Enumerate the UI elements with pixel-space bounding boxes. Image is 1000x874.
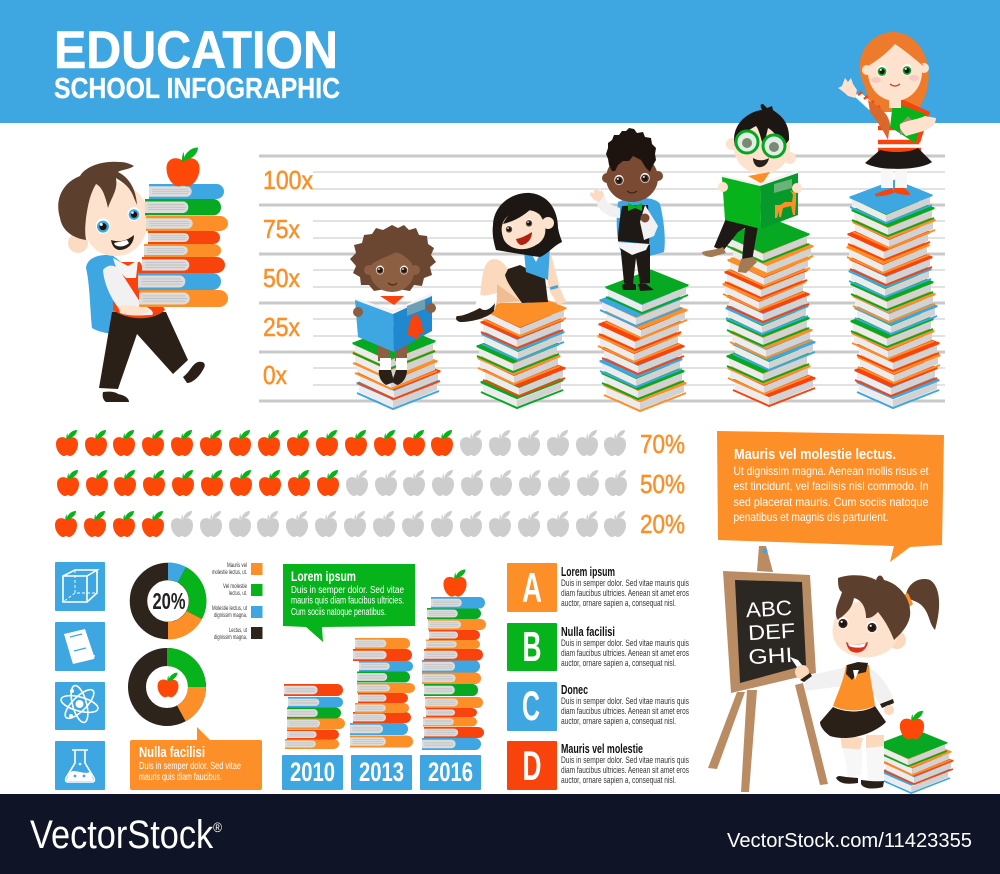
donut legend: Mauris vel [227, 563, 247, 569]
skirt [820, 706, 886, 738]
chalk letters: ABC [745, 597, 792, 622]
year label 2013 [351, 755, 412, 790]
footer logo: VectorStock [30, 813, 243, 857]
shoes [622, 283, 636, 290]
easel with chalkboard [708, 546, 828, 792]
donut legend: Molestie lectus, ut [212, 606, 247, 612]
orange vest [833, 665, 875, 710]
apple on 2016 stack [443, 569, 467, 597]
donut chart apple [137, 648, 206, 721]
book stack 4 [723, 219, 815, 406]
donut legend [212, 563, 262, 641]
scale labels [263, 165, 313, 390]
hair [350, 225, 436, 291]
orange speech bubble [717, 431, 944, 562]
open green book [721, 170, 798, 229]
chalk letters: GHI [748, 644, 793, 669]
bubble body: sed placerat mauris. Cum sociis natoque [734, 495, 929, 509]
glasses [736, 131, 758, 153]
book stack 2013 [350, 638, 415, 748]
board frame [723, 571, 816, 693]
hand and chalk [790, 657, 812, 682]
socks [843, 748, 863, 777]
shirt collar [113, 258, 138, 278]
item A [507, 563, 689, 612]
item B: Duis in semper dolor. Sed vitae mauris quis [561, 638, 689, 649]
face [364, 265, 374, 275]
book stack 2016 [422, 597, 486, 750]
chalk letters [745, 597, 797, 669]
bubble body: Ut dignissim magna. Aenean mollis risus et [734, 464, 929, 478]
legs [881, 168, 893, 188]
item B [507, 623, 689, 671]
raised leg [480, 259, 530, 303]
ponytail [906, 579, 939, 630]
icon: book [55, 622, 105, 671]
vest [113, 262, 165, 318]
scale labels: 25x [263, 312, 300, 342]
easel top [757, 546, 773, 572]
fringe [868, 40, 923, 66]
open blue book [355, 293, 432, 352]
item C: Duis in semper dolor. Sed vitae mauris quis [561, 696, 689, 707]
item D [507, 741, 689, 790]
bubble body [734, 464, 929, 524]
item A: Duis in semper dolor. Sed vitae mauris quis [561, 578, 689, 589]
item C [507, 682, 689, 731]
grid lines scale [259, 156, 945, 401]
item C: Donec [561, 682, 588, 697]
icon: deer [775, 190, 796, 218]
item B: auctor, ornare sapien a, consequat nisl. [561, 658, 676, 669]
teacher girl [790, 575, 939, 789]
icon: apple [158, 673, 178, 697]
braid [868, 100, 890, 140]
percent labels: 20% [640, 509, 685, 539]
percent labels: 50% [640, 469, 685, 499]
green speech bubble: Duis in semper dolor. Sed vitae [291, 585, 404, 596]
icon: flask [55, 741, 105, 790]
item D: Mauris vel molestie [561, 741, 643, 756]
apple on small stack [900, 711, 924, 739]
scale labels: 100x [263, 165, 313, 195]
book stack 2 [477, 293, 566, 408]
green speech bubble: Lorem ipsum [291, 568, 356, 584]
year label 2016 [420, 755, 481, 790]
donut legend: dignissim magna. [214, 635, 247, 641]
bow tie [628, 203, 642, 211]
scale labels: 75x [263, 214, 300, 244]
donut legend: dignissim magna. [214, 613, 247, 619]
hair [734, 104, 789, 148]
mouth [753, 158, 769, 167]
held green book [890, 97, 930, 143]
hair [493, 193, 562, 257]
year label 2016: 2016 [428, 757, 473, 787]
icon: bird [408, 314, 423, 340]
boy's book stack [138, 184, 228, 307]
shoes [875, 188, 894, 196]
vest [524, 247, 550, 280]
item D: auctor, ornare sapien a, consequat nisl. [561, 775, 676, 786]
chalkboard [735, 580, 806, 683]
icon: cube [55, 562, 105, 611]
sock and shoe [474, 295, 497, 316]
book stack 2010 [284, 684, 345, 749]
donut legend: lectus, ut. [229, 591, 247, 597]
item D: diam faucibus ultricies. Aenean sit amet eros [561, 765, 689, 776]
waving arm [854, 92, 883, 118]
item A: diam faucibus ultricies. Aenean sit amet eros [561, 588, 689, 599]
green speech bubble: mauris quis diam faucibus ultricies. [291, 596, 404, 606]
header band [0, 0, 1000, 123]
boy carrying books [58, 162, 205, 402]
item A: A [522, 564, 542, 611]
item A: auctor, ornare sapien a, consequat nisl. [561, 598, 676, 609]
row 50 percent [57, 470, 627, 496]
legs [714, 216, 758, 261]
subtitle: SCHOOL INFOGRAPHIC [54, 73, 340, 105]
shoes [702, 247, 726, 257]
easel legs [708, 692, 745, 769]
sitting girl [456, 193, 566, 322]
item C: C [522, 682, 540, 729]
row 20 percent [55, 511, 626, 537]
head [58, 162, 148, 256]
item C: auctor, ornare sapien a, consequat nisl. [561, 716, 676, 727]
boy with glasses reading [702, 104, 802, 273]
hands [718, 182, 728, 192]
other sleeve [862, 667, 894, 708]
book stack 1 [353, 326, 440, 409]
item D: D [522, 742, 542, 789]
legs [378, 345, 390, 361]
ear [888, 631, 906, 649]
collar [846, 662, 868, 680]
hands [353, 307, 363, 317]
shirt [380, 296, 404, 305]
donut legend: molestie lectus, ut. [212, 570, 247, 576]
item D: Duis in semper dolor. Sed vitae mauris quis [561, 755, 689, 766]
item B: Nulla facilisi [561, 624, 615, 639]
year label 2013: 2013 [359, 757, 404, 787]
hand and arm [900, 116, 936, 136]
apple on boy's stack [166, 148, 200, 186]
trousers [620, 243, 650, 284]
backpack [617, 198, 665, 256]
apple rating rows [55, 430, 627, 537]
orange callout: Duis in semper dolor. Sed vitae [139, 761, 241, 772]
face [734, 122, 790, 174]
footer logo: ® [213, 819, 223, 835]
ears [726, 138, 738, 150]
book stack 5 [847, 180, 940, 408]
face [862, 65, 872, 75]
footer band [0, 794, 1000, 874]
scale labels: 0x [263, 360, 287, 390]
scale labels: 50x [263, 263, 300, 293]
green speech bubble: Cum sociis natoque penatibus. [291, 607, 386, 618]
row 70 percent [56, 430, 626, 456]
bubble body: est tincidunt, vel facilisis nisl commodo. In [734, 479, 928, 493]
red-haired girl on top [838, 32, 936, 196]
boy's hand [118, 305, 150, 315]
shoes [103, 392, 129, 402]
item A: Lorem ipsum [561, 564, 615, 579]
icon: atom [55, 682, 105, 730]
footer url: VectorStock.com/11423355 [727, 830, 972, 852]
hair [836, 575, 910, 640]
donut legend: Lectus, ut [229, 628, 247, 634]
sleeve [103, 266, 153, 316]
face [832, 601, 898, 657]
drawing arm [803, 667, 847, 691]
book stack 3 [598, 270, 688, 411]
item B: B [522, 623, 542, 670]
item B: diam faucibus ultricies. Aenean sit amet eros [561, 648, 689, 659]
green speech bubble [283, 564, 415, 642]
percent labels: 70% [640, 429, 685, 459]
sleeve right [640, 205, 658, 240]
left arm waving [596, 188, 620, 218]
orange callout [130, 727, 262, 790]
backpack [86, 255, 125, 335]
face [602, 173, 612, 183]
donut legend: Vel molestie [223, 584, 247, 590]
year label 2010 [282, 755, 343, 790]
vest [618, 205, 649, 244]
bubble body: penatibus et magnis dis parturient. [734, 510, 888, 524]
reading girl [350, 225, 436, 385]
shirt [748, 172, 770, 184]
hand [640, 214, 650, 222]
face [502, 210, 545, 249]
skirt [505, 265, 548, 303]
donut value: 20% [152, 588, 186, 614]
striped top [878, 112, 920, 152]
shoes [836, 776, 858, 784]
percent labels [640, 429, 685, 539]
bubble heading: Mauris vel molestie lectus. [734, 446, 896, 463]
arm [543, 250, 566, 305]
year label 2010: 2010 [290, 757, 335, 787]
small book stack [878, 730, 953, 793]
hair back [860, 32, 929, 140]
title: EDUCATION [54, 21, 338, 80]
legs [840, 735, 863, 750]
item C: diam faucibus ultricies. Aenean sit amet eros [561, 706, 689, 717]
skirt [865, 148, 932, 169]
neck [889, 98, 901, 108]
hair [606, 128, 656, 172]
donut chart 20% [138, 562, 206, 640]
orange callout: mauris quis diam faucibus. [139, 772, 222, 783]
orange callout: Nulla facilisi [139, 744, 205, 761]
trousers [99, 312, 188, 389]
chalk letters: DEF [748, 620, 796, 645]
standing boy with backpack [590, 128, 665, 291]
